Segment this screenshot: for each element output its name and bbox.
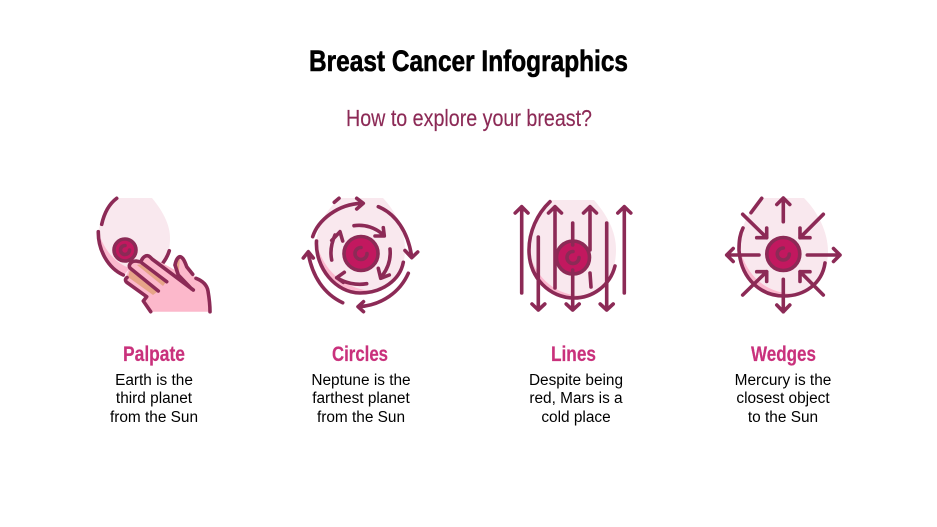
icon: wedges (727, 198, 840, 312)
icon: lines (515, 200, 631, 310)
text: lines: Despite being (529, 372, 623, 389)
text: lines: red, Mars is a (529, 390, 623, 407)
text: circles: Neptune is the (311, 372, 411, 389)
text: palpate: third planet (116, 390, 193, 407)
text: lines: cold place (541, 409, 611, 426)
text: lines (529, 372, 623, 426)
text: circles: farthest planet (312, 390, 410, 407)
heading: wedges: Wedges (751, 343, 816, 366)
text: wedges: Mercury is the (735, 372, 831, 389)
heading: palpate: Palpate (123, 343, 185, 366)
heading: circles: Circles (332, 343, 388, 366)
icon: circles (303, 198, 418, 312)
text: wedges: to the Sun (748, 409, 818, 426)
text: wedges (735, 372, 831, 426)
text: circles (311, 372, 411, 426)
text: palpate: Earth is the (115, 372, 193, 389)
subtitle: How to explore your breast? (346, 105, 592, 131)
heading: lines: Lines (551, 343, 596, 366)
text: wedges: closest object (736, 390, 830, 407)
title: Breast Cancer Infographics (309, 45, 628, 78)
icon: palpate (98, 198, 210, 312)
text: circles: from the Sun (317, 409, 405, 426)
text: palpate: from the Sun (110, 409, 198, 426)
text: palpate (110, 372, 198, 426)
